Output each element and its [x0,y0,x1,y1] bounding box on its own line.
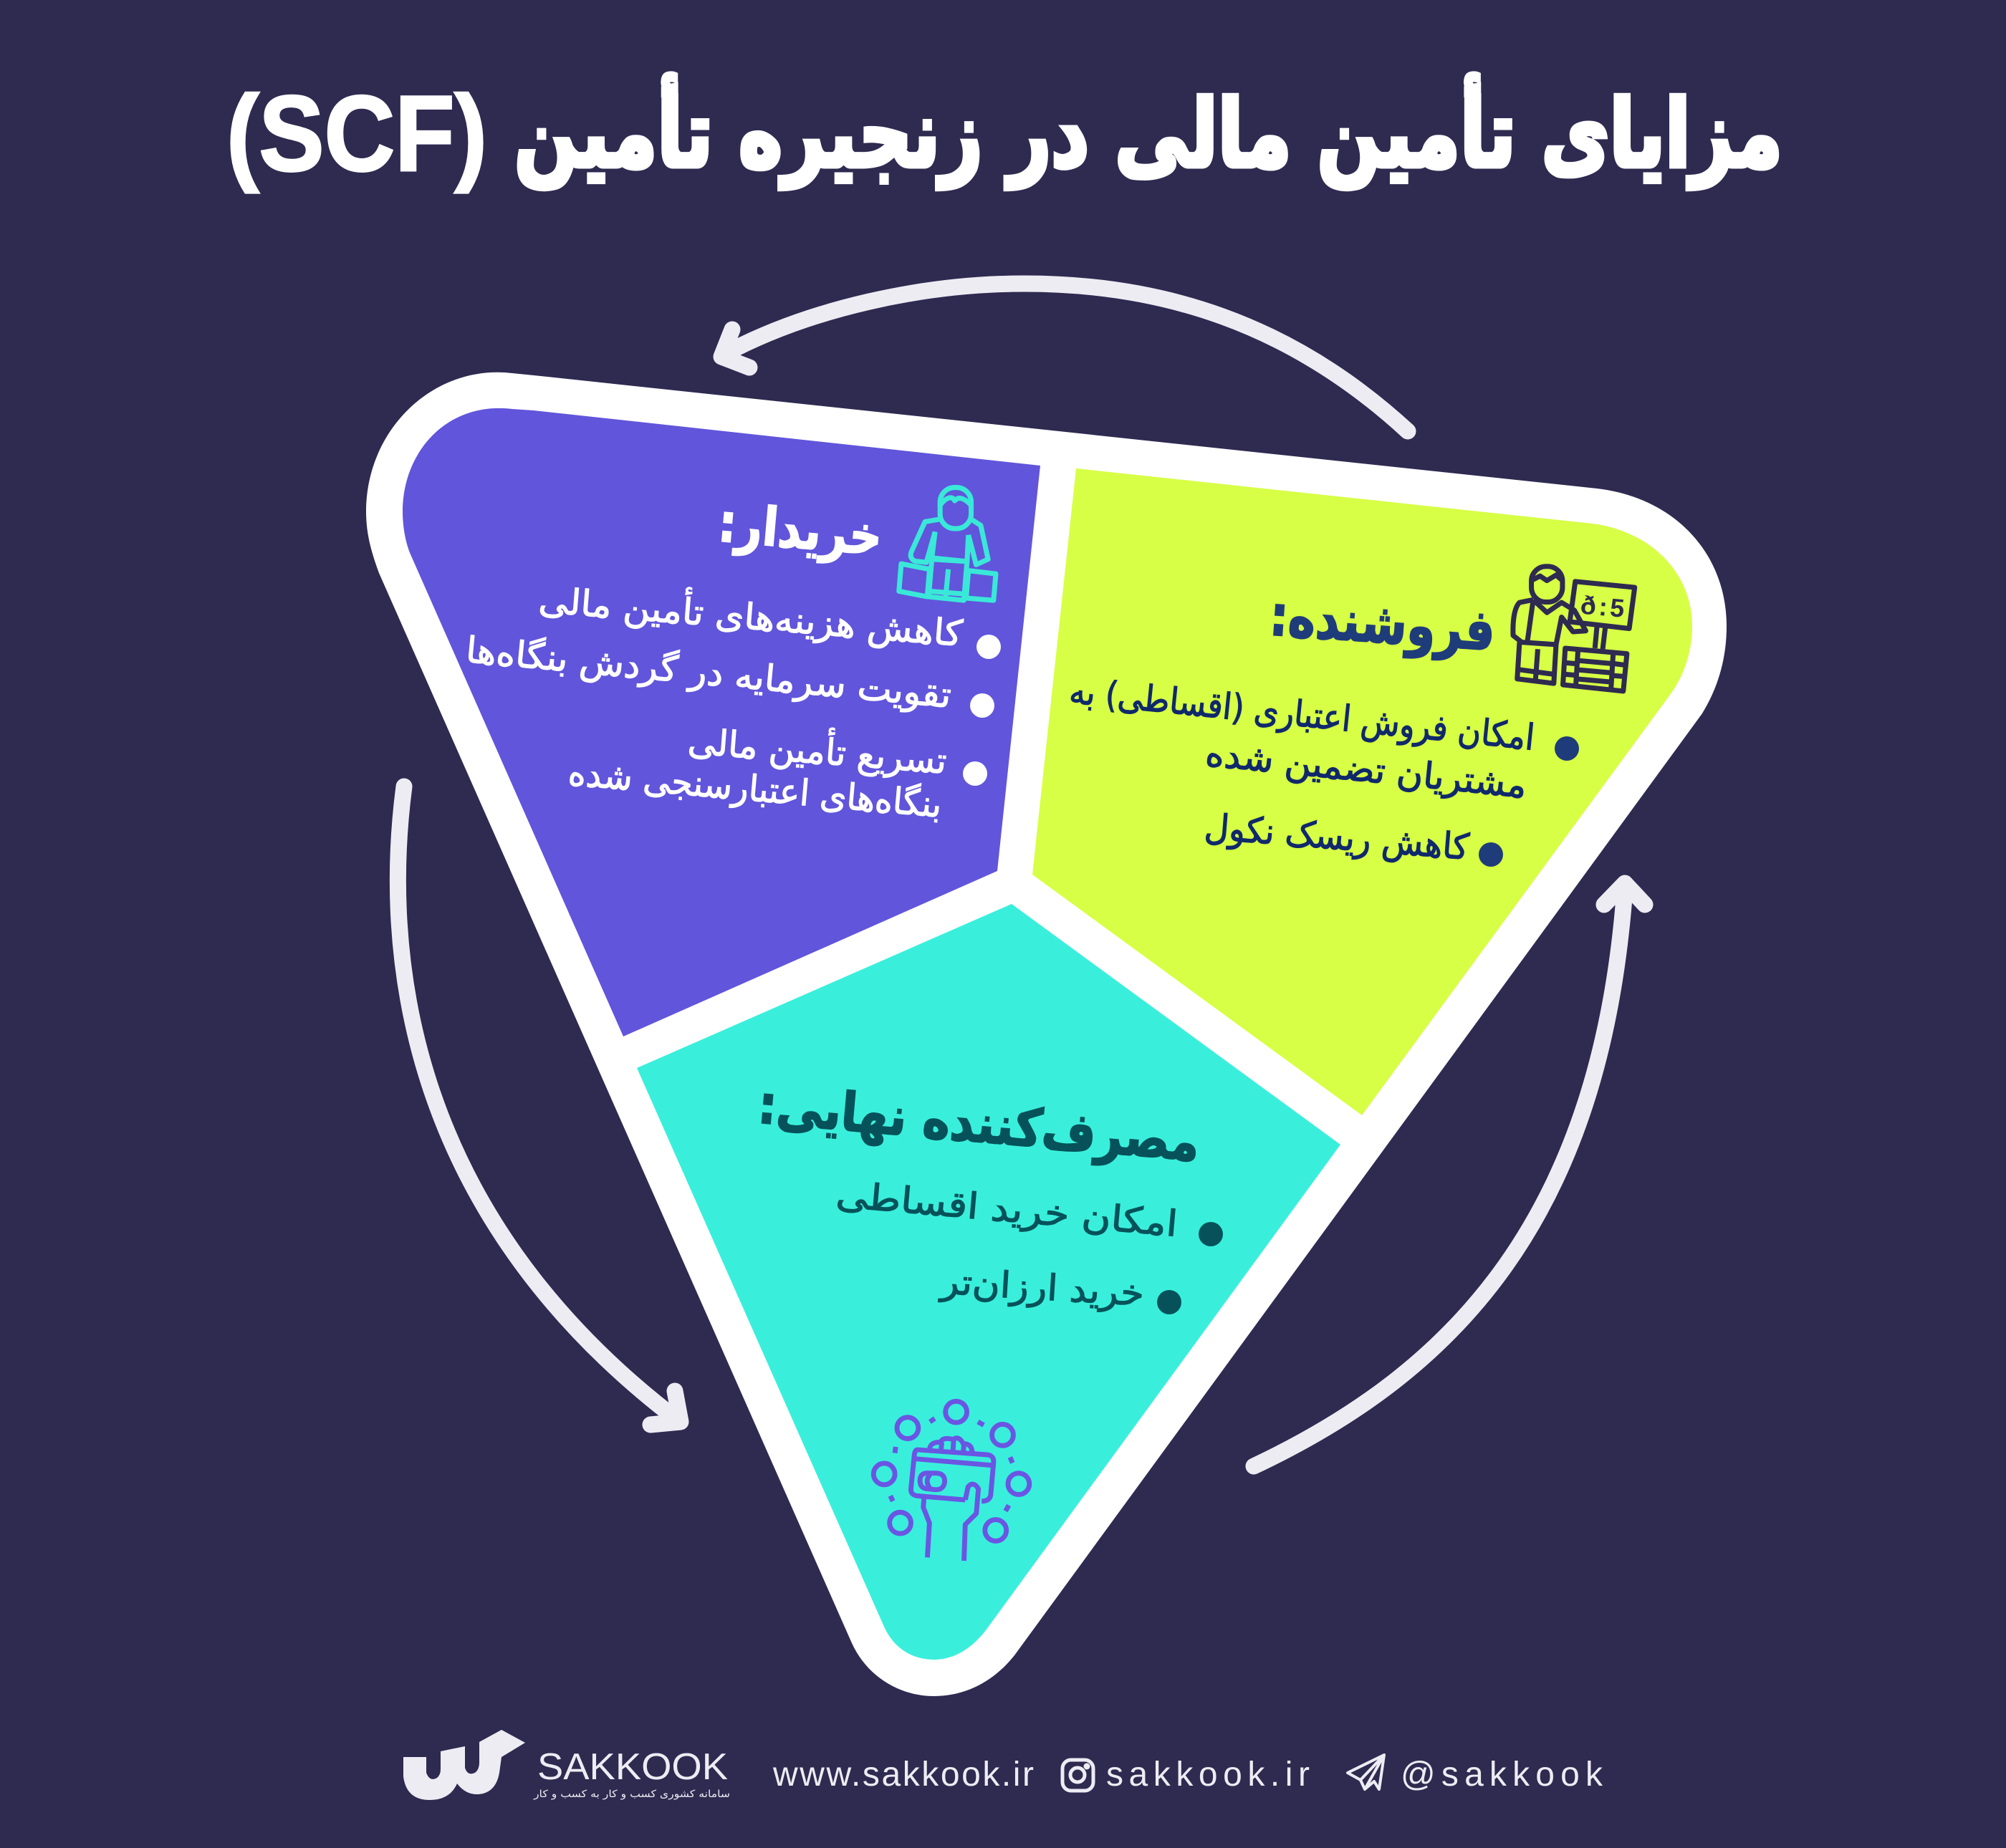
icon: salesman with board: ð:5 [1579,591,1626,623]
title [226,73,1782,193]
footer: brand name: SAKKOOK [537,1746,728,1788]
icon: hand holding card with coins [873,1401,1030,1561]
footer: instagram handle: sakkook.ir [1106,1756,1310,1794]
bullet list: end consumer [835,1174,1223,1314]
bullet list: end consumer: خرید ارزان‌تر [938,1261,1146,1314]
icon: shopper with bags [899,488,996,600]
bullet list: buyer: بنگاه‌های اعتبارسنجی شده [567,752,944,826]
arrow: left, buyer to consumer [398,786,681,1425]
bullet list: buyer [464,575,1001,826]
panel: end consumer [637,904,1340,1660]
heading: buyer: خریدار: [716,492,885,568]
footer: website: www.sakkook.ir [772,1756,1034,1794]
bullet list: seller: مشتریان تضمین شده [1204,733,1529,807]
bullet list: buyer: تسریع تأمین مالی [686,716,949,783]
diagram frame: white rounded triangle [366,372,1727,1696]
heading: end consumer: مصرف‌کننده نهایی: [756,1074,1202,1175]
icon: instagram [1062,1760,1093,1791]
bullet list: seller: کاهش ریسک نکول [1203,806,1471,868]
footer: telegram handle: @sakkook [1401,1756,1603,1794]
bullet list: seller: امکان فروش اعتباری (اقساطی) به [1067,670,1537,759]
title: (SCF) [226,73,487,193]
arrow: top, seller to buyer [721,284,1408,431]
arrow: right, consumer to seller [1254,883,1645,1466]
footer: logo mark [403,1730,525,1800]
bullet list: buyer: تقویت سرمایه در گردش بنگاه‌ها [464,629,953,716]
footer: brand name: سامانه کشوری کسب و کار به کسب و کار [533,1789,730,1800]
icon: salesman with board [1513,567,1635,691]
bullet list: end consumer: امکان خرید اقساطی [835,1174,1179,1245]
icon: telegram plane [1348,1755,1384,1789]
heading: seller: فروشنده: [1267,584,1497,664]
bullet list: buyer: کاهش هزینه‌های تأمین مالی [537,575,964,655]
panel: seller [1032,468,1692,1115]
panel: buyer [403,408,1040,1036]
bullet list: seller [1067,670,1579,868]
